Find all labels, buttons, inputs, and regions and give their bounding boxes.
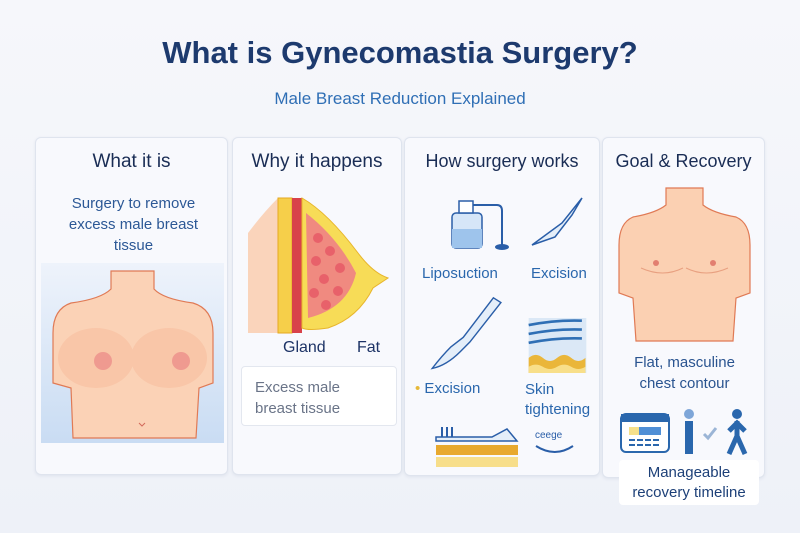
icon: scalpel <box>532 198 583 246</box>
callout: recovery timeline <box>619 460 759 505</box>
icon: arrow <box>535 430 574 453</box>
illustration: breast cross-section <box>248 197 389 334</box>
label: skin tightening <box>525 381 590 418</box>
panel: what it is <box>35 137 228 475</box>
label: liposuction: Liposuction <box>422 265 498 282</box>
icon: scalpel long <box>430 296 502 370</box>
icon: skin layers <box>528 318 586 373</box>
illustration: flat chest <box>618 187 751 342</box>
callout: excess tissue <box>241 366 397 426</box>
label: skin tightening: tightening <box>525 401 590 418</box>
icon: tissue layers <box>435 427 518 467</box>
label: excision: Excision <box>531 265 587 282</box>
text: result: Flat, masculine chest contour <box>634 354 735 392</box>
label: fat: Fat <box>357 339 380 356</box>
heading: why it happens: Why it happens <box>252 151 382 172</box>
callout: excess tissue: Excess male breast tissue <box>255 379 340 417</box>
icon: people walking <box>684 409 748 455</box>
heading: goal & recovery: Goal & Recovery <box>615 151 752 171</box>
panel: goal & recovery <box>602 137 765 478</box>
icon: calendar <box>620 413 670 453</box>
icon: arrow: ceege <box>535 430 563 441</box>
panel: how surgery works <box>404 137 600 476</box>
subtitle: Male Breast Reduction Explained <box>274 89 526 108</box>
heading: how surgery works: How surgery works <box>425 151 579 171</box>
icon: liposuction <box>451 200 509 250</box>
panel: why it happens <box>232 137 402 475</box>
illustration: chest <box>41 263 224 443</box>
callout: recovery timeline: Manageable recovery timeline <box>632 464 746 501</box>
label: skin tightening: Skin <box>525 381 554 398</box>
label: gland: Gland <box>283 339 326 356</box>
heading: what it is: What it is <box>92 151 171 172</box>
title: What is Gynecomastia Surgery? <box>162 35 638 70</box>
text: description: Surgery to remove excess male breast tissue <box>69 195 198 254</box>
label: excision 2: • Excision <box>415 380 480 397</box>
